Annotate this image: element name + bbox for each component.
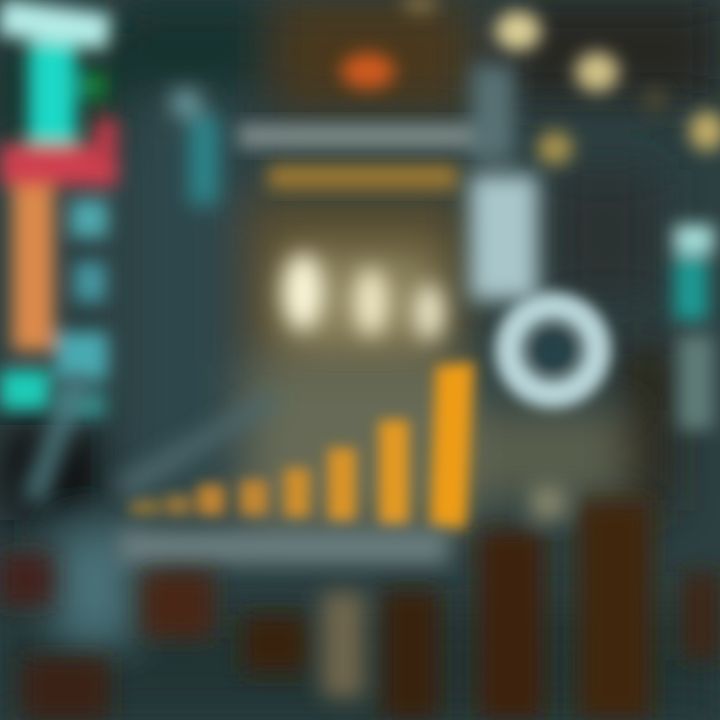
panel: pale right block	[470, 65, 538, 300]
bar chart: rising orange bars	[130, 362, 474, 528]
icon: orange glow	[341, 53, 395, 89]
subheading bar	[268, 165, 458, 189]
heading bar	[238, 124, 488, 148]
glowing white lights	[280, 250, 444, 350]
light haze	[280, 250, 440, 350]
panel: cyan and red letter shapes	[0, 0, 118, 418]
light glows	[283, 254, 444, 340]
panel: central chart board	[118, 124, 488, 564]
bar columns: dark brown foreground	[0, 487, 720, 720]
panel: teal figure at left of board	[22, 90, 280, 504]
chart baseline	[118, 530, 448, 564]
panel: right teal block	[674, 225, 714, 430]
icon: ceiling lights	[402, 0, 720, 165]
icon: ring	[509, 306, 597, 394]
